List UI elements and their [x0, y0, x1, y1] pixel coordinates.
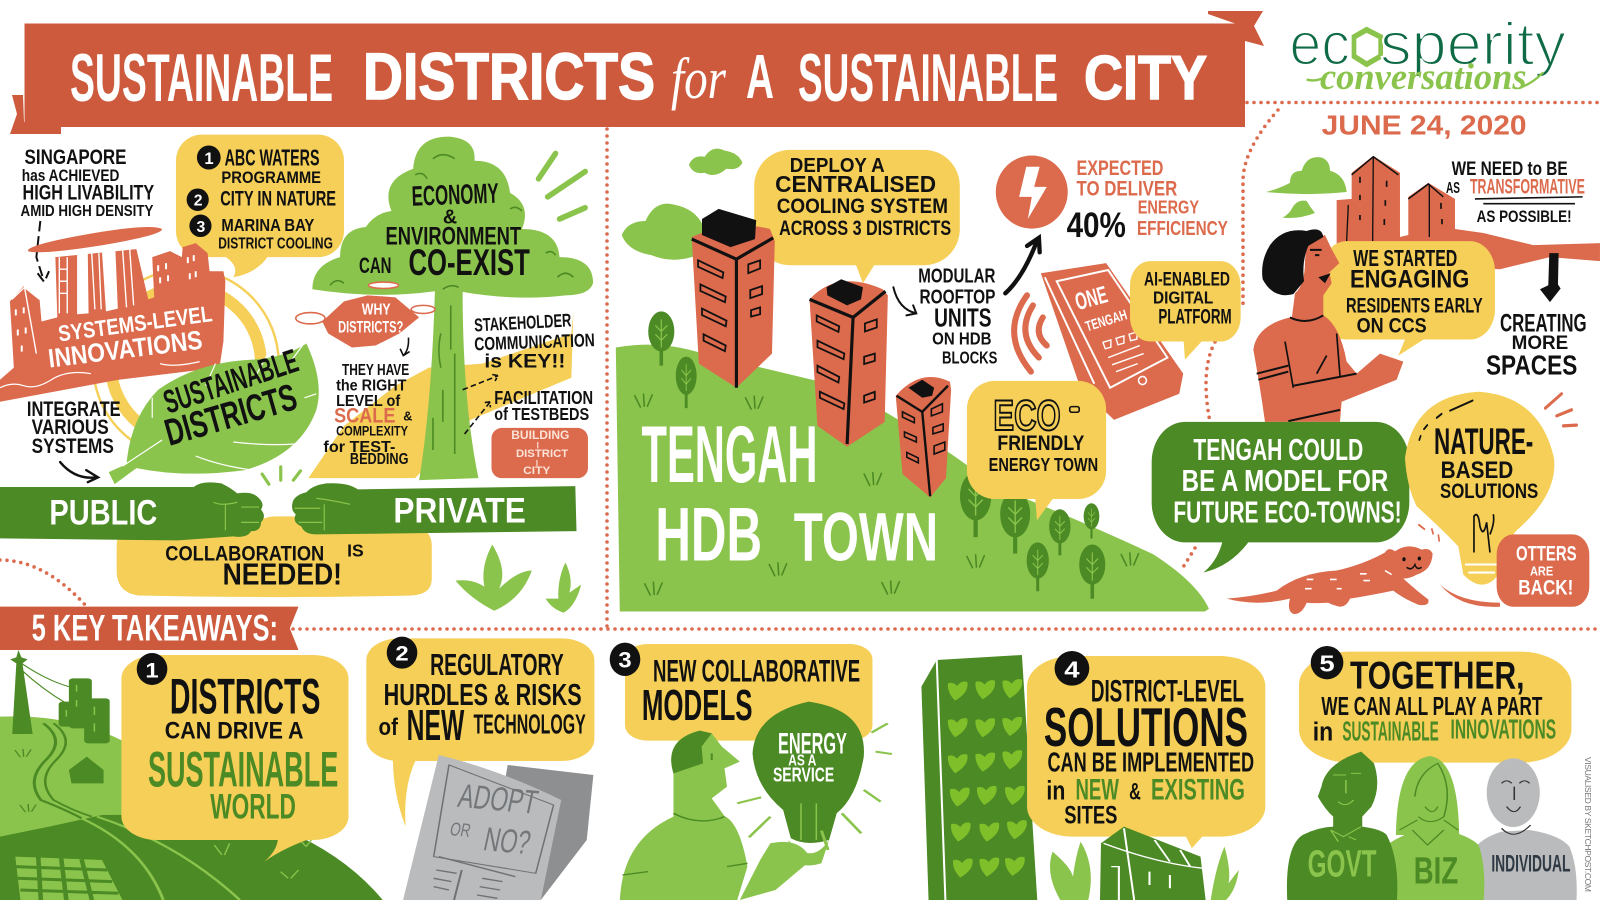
illustration: One Tengah phone: TENGAH [1084, 307, 1129, 335]
icon: signal waves [1014, 295, 1047, 372]
speech bubble: engaging residents: RESIDENTS EARLY [1346, 294, 1483, 318]
speech bubble: eco-friendly energy town: ENERGY TOWN [989, 454, 1098, 475]
arm: public [0, 482, 264, 540]
text: we need to be transformative: WE NEED to BE [1452, 157, 1568, 179]
text: right level of scale [323, 338, 412, 468]
title text: A [746, 43, 774, 112]
grass tufts [635, 394, 1139, 595]
title text: for [671, 46, 726, 111]
panel: takeaways right [821, 646, 1577, 900]
icon: nature-based solutions bulb: SOLUTIONS [1440, 480, 1538, 504]
speech bubble: AI-enabled digital platform: DIGITAL [1153, 288, 1213, 308]
illustration: sustainable districts leaf: DISTRICTS [160, 375, 301, 454]
speech bubble: Tengah could be a model [1152, 422, 1409, 573]
speech bubble: engaging residents [1322, 241, 1495, 356]
green handshake ticks [262, 467, 301, 484]
text: right level of scale: & [403, 408, 412, 423]
text: Singapore livability [21, 145, 154, 282]
yellow stripe behind tree [308, 313, 573, 478]
illustration: tree with economy and environment text: CAN [359, 253, 391, 278]
speech bubble: takeaway 2: REGULATORY [430, 648, 564, 682]
text: modular rooftop units: BLOCKS [942, 348, 997, 368]
title text: DISTRICTS [363, 39, 655, 113]
speech bubble: three programmes [176, 135, 344, 277]
title text [70, 39, 1207, 116]
illustration: sustainable districts leaf: SUSTAINABLE [159, 341, 303, 421]
speech bubble: engaging residents: WE STARTED [1353, 245, 1457, 271]
speech bubble: AI-enabled digital platform: AI-ENABLED [1144, 268, 1230, 290]
title banner [10, 11, 1264, 134]
text: 40% energy efficiency: ENERGY [1138, 197, 1199, 218]
illustration: tree with economy and environment text: ENVIRONMENT [386, 223, 521, 250]
arm: private [292, 483, 576, 534]
speech bubble: takeaway 4: NEW [1076, 774, 1119, 806]
logo: ecosperity conversations: ec [1289, 10, 1350, 77]
illustration: green wall building [921, 655, 1037, 900]
panel: takeaways right: CAN BE IMPLEMENTED [1047, 748, 1254, 778]
title text: SUSTAINABLE [70, 40, 333, 116]
speech bubble: eco-friendly energy town: ECO [993, 392, 1061, 439]
hill [616, 345, 1209, 612]
icon: energy as a service bulb: AS A [788, 753, 816, 770]
text: Tengah HDB Town: HDB [655, 492, 762, 578]
speech bubble: AI-enabled digital platform: PLATFORM [1158, 306, 1232, 329]
panel: takeaways right: DISTRICT-LEVEL [1091, 673, 1244, 709]
callout: collaboration is needed: NEEDED! [223, 558, 342, 592]
text: stakeholder communication and testbeds [463, 309, 595, 434]
text: Singapore livability: SINGAPORE [25, 145, 127, 169]
text: we need to be transformative: AS [1446, 180, 1460, 197]
panel: sustainable districts left section [0, 135, 595, 613]
yellow rings [93, 269, 279, 458]
speech bubble: three programmes: ABC WATERS [225, 144, 319, 171]
text: creating more spaces: MORE [1512, 331, 1568, 353]
illustration: One Tengah phone [1041, 263, 1183, 420]
clouds [1266, 157, 1347, 218]
text: right level of scale: BEDDING [350, 451, 408, 468]
speech bubble: three programmes: 1 [204, 149, 214, 168]
panel: Tengah HDB town [616, 149, 1228, 612]
text: modular rooftop units: MODULAR [918, 265, 995, 288]
person: govt: GOVT [1308, 842, 1377, 885]
building 2 [810, 279, 888, 447]
speech bubble: takeaway 4: in [1046, 776, 1065, 806]
credit: visualised by sketchpost: VISUALISED BY SKETCHPOST.COM [1583, 757, 1593, 892]
text: right level of scale: for TEST- [323, 439, 395, 456]
icon: nature-based solutions bulb [1405, 392, 1577, 585]
speech bubble: centralised cooling: COOLING SYSTEM [777, 194, 948, 218]
speech bubble: three programmes: DISTRICT COOLING [218, 235, 333, 252]
illustration: skyline with systems-level innovations [0, 227, 225, 402]
arm: public: PUBLIC [49, 493, 157, 532]
person: biz [1389, 756, 1484, 900]
panel: takeaways right: SOLUTIONS [1044, 697, 1248, 758]
speech bubble: takeaway 1: WORLD [210, 787, 296, 826]
box: building to district to city: DISTRICT [516, 448, 568, 460]
illustration: tree with economy and environment text: ECONOMY [411, 177, 499, 212]
illustration: tree with economy and environment text: CO-EXIST [408, 242, 530, 283]
speech bubble: three programmes: MARINA BAY [221, 215, 315, 235]
speech bubble: Tengah could be a model: BE A MODEL FOR [1182, 464, 1388, 498]
text: Singapore livability: has ACHIEVED [22, 166, 119, 185]
speech bubble: takeaway 2: of [379, 713, 398, 740]
drone: why districts: DISTRICTS? [338, 318, 403, 337]
text: right level of scale: LEVEL of [336, 393, 401, 410]
panel: takeaways left: 5 KEY TAKEAWAYS: [32, 608, 278, 649]
text: we need to be transformative [1446, 157, 1585, 226]
icon: nature-based solutions bulb: NATURE- [1434, 421, 1533, 463]
speech bubble: centralised cooling [754, 150, 960, 283]
logo: ecosperity conversations: conversations [1320, 58, 1527, 98]
speech bubble: takeaway 2 [366, 637, 594, 827]
callout: collaboration is needed [117, 516, 432, 597]
speech bubble: Tengah could be a model: TENGAH COULD [1193, 433, 1363, 467]
illustration: man speaking [1253, 229, 1403, 422]
arm: private: PRIVATE [393, 491, 526, 530]
title text: SUSTAINABLE [798, 40, 1058, 116]
text: 40% energy efficiency [1067, 157, 1228, 245]
speech bubble: three programmes: CITY IN NATURE [220, 188, 336, 211]
banner: 5 key takeaways [0, 607, 298, 650]
light rays [821, 723, 892, 850]
callout: otters are back [1440, 534, 1589, 607]
speech bubble: takeaway 2: 2 [395, 641, 409, 665]
text: Tengah HDB Town: TOWN [794, 500, 938, 576]
callout: collaboration is needed: IS [347, 540, 364, 561]
text: modular rooftop units: ON HDB [932, 329, 991, 349]
illustration: tree with economy and environment text [312, 137, 593, 480]
text: right level of scale: SCALE [334, 404, 395, 428]
speech bubble: takeaway 5: 5 [1319, 652, 1335, 677]
text: Singapore livability: AMID HIGH DENSITY [21, 203, 153, 220]
panel: takeaways left: TECHNOLOGY [473, 709, 586, 740]
speech bubble: takeaway 4: 4 [1064, 657, 1080, 683]
speech bubble: takeaway 4 [1027, 651, 1265, 848]
box: building to district to city: BUILDING [511, 428, 569, 442]
panel: takeaways left [0, 607, 872, 900]
speech bubble: takeaway 3: 3 [618, 648, 632, 673]
speech bubble: takeaway 1: 1 [145, 658, 159, 682]
icon: lightning circle [996, 155, 1068, 229]
text: Tengah HDB Town [642, 410, 938, 578]
text: 40% energy efficiency: EFFICIENCY [1137, 218, 1228, 240]
speech bubble: Tengah could be a model: FUTURE ECO-TOWNS! [1173, 495, 1402, 529]
logo: ecosperity conversations [1289, 10, 1566, 98]
text: stakeholder communication and testbeds: of TESTBEDS [494, 404, 589, 424]
illustration: One Tengah phone: ONE [1072, 281, 1111, 316]
speech bubble: takeaway 4: SITES [1064, 800, 1117, 829]
clouds [622, 149, 742, 260]
panel: takeaways left: DISTRICTS [170, 668, 320, 724]
panel: right column [1130, 10, 1600, 614]
text: date: JUNE 24, 2020 [1322, 111, 1527, 141]
box: building to district to city [491, 428, 588, 478]
callout: otters are back: ARE [1530, 563, 1553, 579]
speech bubble: three programmes: 2 [194, 193, 203, 210]
speech bubble: engaging residents: ENGAGING [1350, 264, 1469, 293]
illustration: tree with economy and environment text: & [443, 206, 457, 228]
text: stakeholder communication and testbeds: STAKEHOLDER [474, 309, 572, 336]
panel: takeaways left: SUSTAINABLE [148, 741, 338, 797]
person: govt [1287, 752, 1397, 900]
text: integrate various systems with arrow [27, 397, 121, 482]
illustration: town buildings and ground [1337, 156, 1600, 269]
illustration: adopt or no newspaper: ADOPT [455, 778, 541, 821]
arrow to energy [1005, 238, 1040, 293]
illustration: adopt or no newspaper [403, 755, 593, 900]
panel: takeaways left: HURDLES & RISKS [384, 678, 582, 712]
callout: otters are back: BACK! [1518, 576, 1573, 600]
illustration: eco house and plants [1050, 827, 1239, 900]
icon: nature-based solutions bulb: BASED [1441, 456, 1513, 484]
text: 40% energy efficiency: TO DELIVER [1076, 178, 1177, 201]
text: stakeholder communication and testbeds: is KEY!! [484, 352, 565, 373]
text: modular rooftop units: UNITS [934, 304, 991, 332]
speech bubble: eco-friendly energy town: FRIENDLY [997, 432, 1085, 455]
text: ENERGY [778, 727, 847, 760]
speech bubble: engaging residents: ON CCS [1357, 314, 1427, 338]
speech bubble: takeaway 1: CAN DRIVE A [165, 717, 304, 744]
text: NEW COLLABORATIVE [653, 653, 860, 689]
arrow down [1540, 253, 1561, 302]
trees [648, 311, 1105, 599]
speech bubble: AI-enabled digital platform [1130, 261, 1241, 360]
text: creating more spaces [1486, 309, 1587, 381]
building 3 [896, 377, 951, 497]
person: biz: BIZ [1414, 848, 1458, 892]
speech bubble: takeaway 1 [121, 653, 348, 862]
text: right level of scale: COMPLEXITY [336, 423, 408, 439]
illustration: adopt or no newspaper: OR [448, 819, 473, 841]
speech bubble: three programmes: 3 [197, 219, 205, 236]
speech bubble: centralised cooling: ACROSS 3 DISTRICTS [779, 216, 951, 240]
speech bubble: takeaway 2: NEW [407, 701, 464, 749]
icon: energy as a service bulb: SERVICE [773, 763, 834, 786]
speech bubble: takeaway 5 [1299, 646, 1571, 763]
text: Singapore livability: HIGH LIVABILITY [23, 181, 154, 205]
text: we need to be transformative: AS POSSIBLE! [1477, 208, 1572, 226]
illustration: man with lightbulb [620, 731, 811, 900]
speech bubble: centralised cooling: CENTRALISED [775, 171, 936, 197]
speech bubble: takeaway 5: in [1313, 718, 1333, 747]
logo: ecosperity conversations: sperity [1380, 10, 1566, 77]
text: integrate various systems with arrow: INTEGRATE [27, 397, 121, 421]
drone: why districts [296, 282, 435, 348]
text: stakeholder communication and testbeds: FACILITATION [494, 387, 593, 408]
box: building to district to city: CITY [523, 465, 551, 477]
text: integrate various systems with arrow: VARIOUS [32, 415, 109, 439]
illustration: adopt or no newspaper: NO? [480, 821, 534, 862]
text: modular rooftop units [893, 265, 997, 368]
text: stakeholder communication and testbeds: COMMUNICATION [474, 329, 595, 354]
illustration: green landscape [0, 650, 383, 900]
text: modular rooftop units: ROOFTOP [919, 286, 995, 308]
text: 40% energy efficiency: 40% [1067, 206, 1126, 245]
building 1 [692, 209, 775, 388]
drone: why districts: WHY [362, 302, 391, 319]
text: right level of scale: THEY HAVE [342, 362, 409, 379]
icon: energy as a service bulb [737, 702, 864, 865]
person: individual [1476, 758, 1577, 900]
speech bubble: takeaway 4: EXISTING [1151, 774, 1245, 806]
illustration: skyline with systems-level innovations: SYSTEMS-LEVEL [57, 301, 214, 347]
text: 40% energy efficiency: EXPECTED [1076, 157, 1163, 180]
speech bubble: eco-friendly energy town [967, 381, 1106, 520]
plants [456, 544, 581, 613]
callout: collaboration is needed: COLLABORATION [165, 542, 324, 566]
text: Tengah HDB Town: TENGAH [642, 410, 817, 499]
illustration: sustainable districts leaf [109, 341, 319, 484]
text: creating more spaces: SPACES [1486, 351, 1577, 381]
speech bubble: takeaway 3 [610, 643, 872, 741]
callout: otters are back: OTTERS [1516, 543, 1577, 566]
speech bubble: centralised cooling: DEPLOY A [790, 155, 885, 177]
illustration: skyline with systems-level innovations: INNOVATIONS [47, 324, 204, 374]
text: integrate various systems with arrow: SYSTEMS [32, 434, 114, 458]
text: right level of scale: the RIGHT [336, 377, 407, 395]
speech bubble: takeaway 3: MODELS [642, 681, 753, 729]
speech bubble: takeaway 4: & [1129, 778, 1141, 805]
illustration: otter [1227, 524, 1439, 614]
speech bubble: three programmes: PROGRAMME [221, 168, 321, 187]
title text: CITY [1084, 44, 1207, 113]
